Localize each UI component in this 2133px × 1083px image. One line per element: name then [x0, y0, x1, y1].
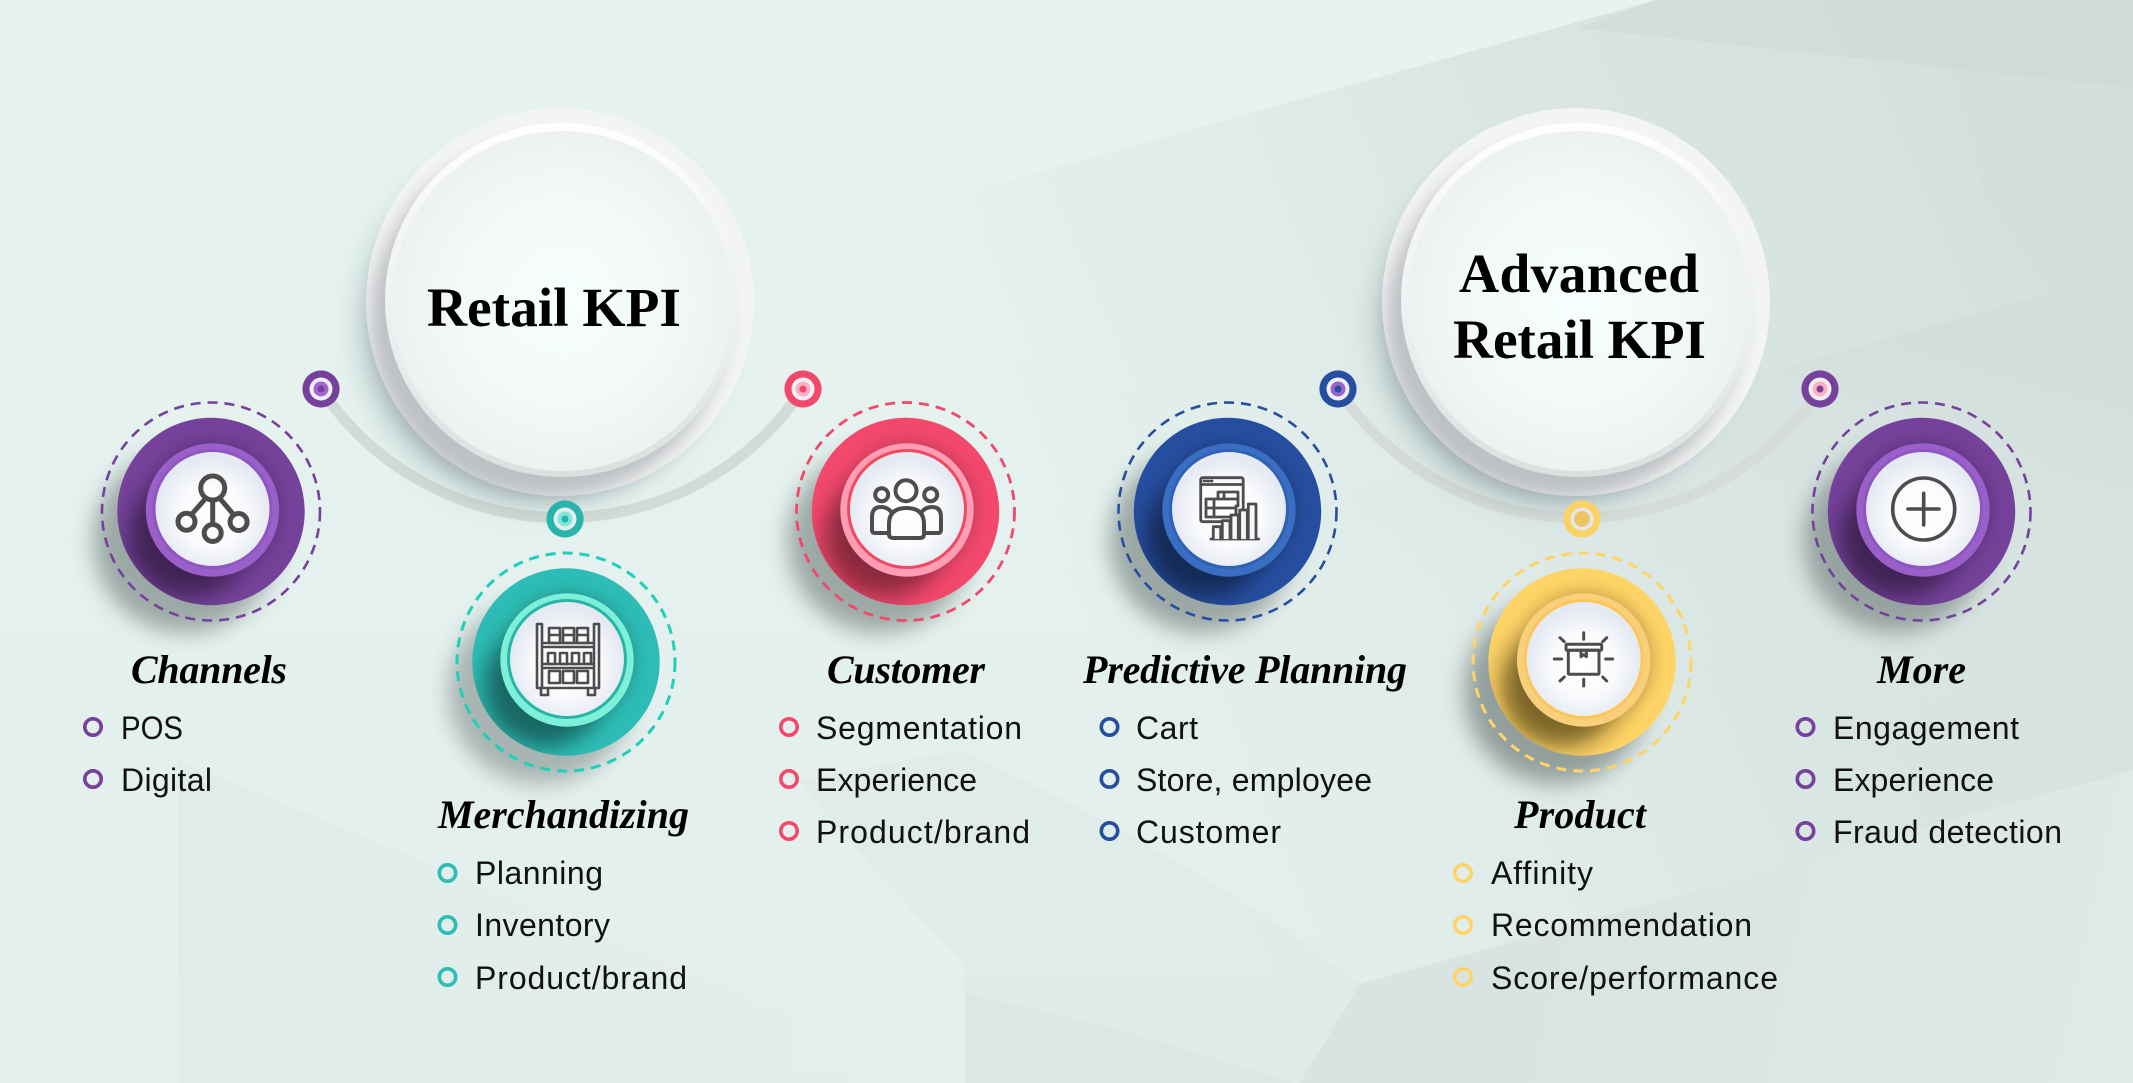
icon: table and bar chart: [1201, 478, 1259, 539]
list: Predictive Planning: Store, employee: [1136, 762, 1372, 798]
panel: Channels: [85, 402, 320, 798]
connector node: yellow: [1563, 500, 1601, 538]
connector arc: Retail KPI: [321, 389, 803, 518]
connector node: purple: [302, 370, 340, 408]
list: Product: Score/performance: [1491, 960, 1778, 996]
badge: Product: [1464, 553, 1691, 784]
heading: Advanced Retail KPI: Retail KPI: [1453, 310, 1706, 371]
list: Predictive Planning: [1101, 710, 1372, 850]
list: Channels: POS: [121, 710, 183, 746]
list: Predictive Planning: Cart: [1136, 710, 1198, 746]
heading: Advanced Retail KPI: Advanced: [1459, 244, 1699, 305]
panel: Product: [1455, 553, 1778, 996]
panel: More: [1797, 402, 2062, 850]
title: Channels: Channels: [131, 647, 287, 692]
title: Merchandizing: Merchandizing: [437, 792, 689, 837]
title: Customer: Customer: [827, 647, 985, 692]
badge: Predictive Planning: [1110, 402, 1336, 633]
list: Merchandizing: Product/brand: [475, 960, 687, 996]
list: Merchandizing: [439, 855, 687, 996]
badge: Customer: [788, 402, 1014, 633]
list: Product: Affinity: [1491, 855, 1593, 891]
list: Customer: Product/brand: [816, 814, 1030, 850]
panel: Merchandizing: [437, 553, 689, 996]
list: Customer: Segmentation: [816, 710, 1022, 746]
badge: Channels: [93, 402, 320, 633]
list: Product: [1455, 855, 1778, 996]
list: More: Engagement: [1833, 710, 2019, 746]
badge: More: [1804, 402, 2030, 633]
list: Merchandizing: Planning: [475, 855, 603, 891]
connector node: teal: [546, 500, 584, 538]
list: Channels: [85, 710, 212, 798]
panel: Predictive Planning: [1082, 402, 1407, 850]
badge: Merchandizing: [448, 553, 675, 784]
icon: people group: [872, 480, 941, 538]
connector node: violet: [1801, 370, 1839, 408]
connector arc: Advanced Retail KPI: [1338, 389, 1820, 518]
connector node: blue: [1319, 370, 1357, 408]
title: Predictive Planning: Predictive Planning: [1082, 647, 1407, 692]
list: Channels: Digital: [121, 762, 212, 798]
panel: Customer: [781, 402, 1030, 850]
list: Predictive Planning: Customer: [1136, 814, 1281, 850]
icon: store shelf: [537, 624, 599, 695]
heading: Retail KPI: Retail KPI: [427, 278, 681, 339]
list: Product: Recommendation: [1491, 907, 1752, 943]
hub circle: Retail KPI: [358, 108, 754, 507]
icon: product box: [1554, 633, 1613, 686]
list: Customer: [781, 710, 1030, 850]
heading: Advanced Retail KPI: [1453, 244, 1706, 371]
list: More: [1797, 710, 2062, 850]
title: Product: Product: [1513, 792, 1648, 837]
list: Merchandizing: Inventory: [475, 907, 610, 943]
connector node: pink: [784, 370, 822, 408]
title: More: More: [1876, 647, 1966, 692]
icon: plus in circle: [1893, 478, 1955, 540]
list: Customer: Experience: [816, 762, 977, 798]
hub circle: Advanced Retail KPI: [1374, 108, 1770, 507]
list: More: Fraud detection: [1833, 814, 2062, 850]
icon: network nodes: [178, 476, 247, 542]
list: More: Experience: [1833, 762, 1994, 798]
